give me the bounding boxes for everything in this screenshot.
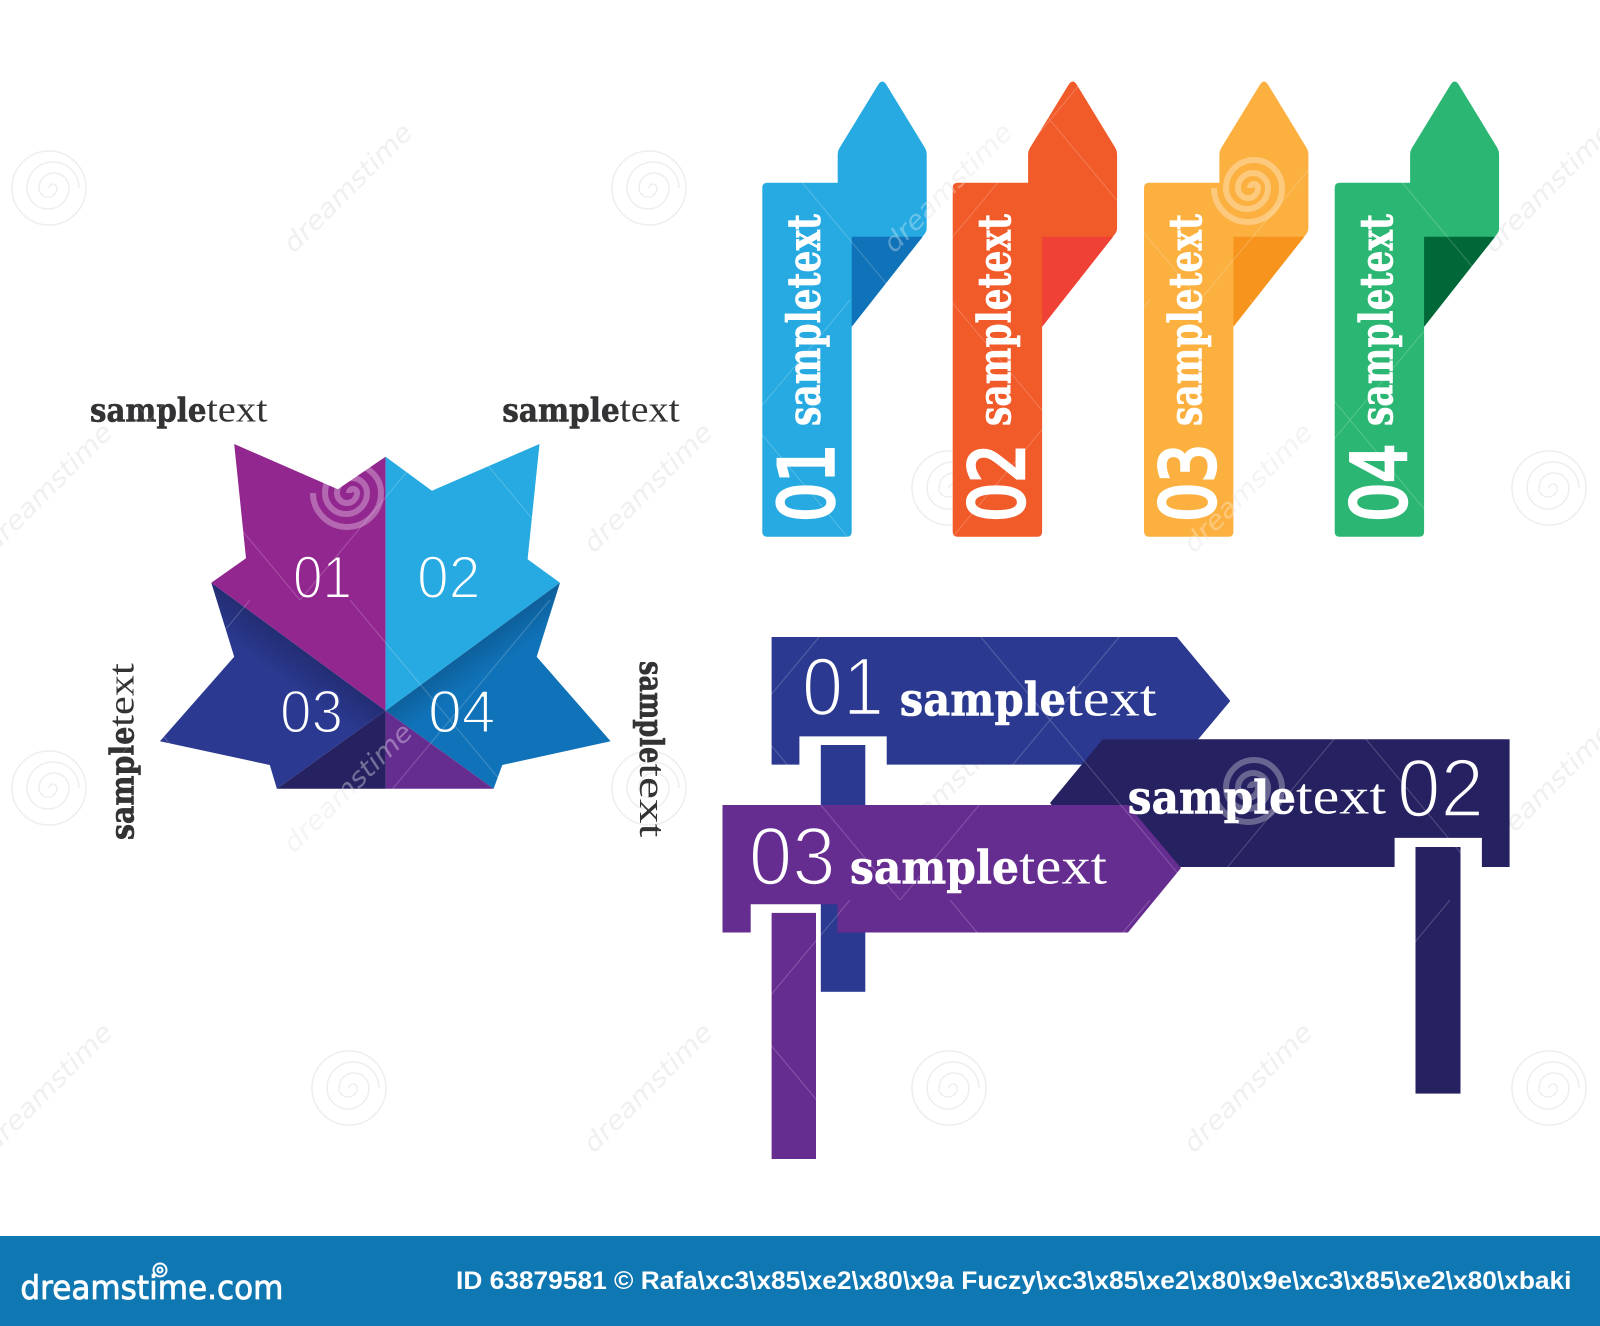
fold shadow left xyxy=(160,583,386,789)
watermark layer: dreamstime xyxy=(1178,1018,1319,1159)
watermark on star bottom: dreamstime xyxy=(278,718,419,859)
number 03: 03 xyxy=(280,678,343,745)
fold xyxy=(852,237,923,327)
sign 01 label xyxy=(900,671,1157,728)
label: star left rotated: text xyxy=(101,662,142,727)
number 04: 04 xyxy=(428,678,496,745)
footer logo: dreamstime.com xyxy=(20,1268,283,1307)
sign 01 number: 01 xyxy=(802,640,884,733)
sign 02 label: sample xyxy=(1128,770,1296,824)
footer bar xyxy=(0,1236,1600,1326)
panel: signpost 03 xyxy=(722,805,1181,1159)
label: star top right: text xyxy=(620,390,680,431)
banner label: sampletext xyxy=(1349,213,1403,426)
banner label: sampletext xyxy=(777,213,831,426)
watermark layer: dreamstime xyxy=(1178,418,1319,559)
panel: banner 02 orange xyxy=(953,82,1117,537)
sign 02 arrow xyxy=(1050,739,1510,867)
label: star left rotated: sample xyxy=(102,727,141,840)
banner number: 04 xyxy=(1335,444,1423,522)
star segment 04 xyxy=(386,583,611,789)
star segment 01 xyxy=(211,444,386,711)
watermark spiral on sign 02 xyxy=(1214,760,1282,822)
panel: banner 01 blue xyxy=(762,82,927,537)
label: star top right: sample xyxy=(502,391,620,430)
number 02: 02 xyxy=(417,544,480,611)
banner label: sampletext xyxy=(967,213,1021,426)
sign 02 number: 02 xyxy=(1397,741,1484,834)
label: star right rotated: text xyxy=(631,763,672,838)
sign 03 number: 03 xyxy=(749,809,836,902)
number 01: 01 xyxy=(293,544,352,611)
watermark text over blue banner: dreamstime xyxy=(878,118,1019,259)
label: star top left: text xyxy=(206,390,268,431)
sign 01 arrow xyxy=(772,637,1230,765)
fold xyxy=(1042,237,1113,327)
panel: star diagram xyxy=(160,444,611,859)
sign 03 arrow xyxy=(722,805,1181,932)
watermark layer: dreamstime xyxy=(578,1018,719,1159)
sign 02 label: text xyxy=(1296,768,1387,826)
footer credit: ID 63879581 © Rafa\xc3\x85\xe2\x80\x9a Fuczy\xc3\x85\xe2\x80\x9e\xc3\x85\xe2\x80\xbaki xyxy=(456,1267,1572,1295)
banner number: 03 xyxy=(1145,444,1233,522)
bottom dark triangle xyxy=(277,711,386,789)
banner number: 01 xyxy=(763,444,851,522)
panel: signpost 02 xyxy=(1050,739,1510,1094)
panel: banner 04 green xyxy=(1335,82,1499,537)
watermark layer: dreamstime xyxy=(278,718,419,859)
watermark layer: dreamstime xyxy=(878,718,1019,859)
watermark layer: dreamstime xyxy=(278,118,419,259)
watermark layer: dreamstime xyxy=(878,118,1019,259)
watermark text over yellow banner: dreamstime xyxy=(1178,418,1319,559)
panel: banner 03 yellow xyxy=(1144,82,1308,537)
banner label: sampletext xyxy=(1159,213,1213,426)
watermark spiral on star xyxy=(313,465,381,527)
star segment 03 xyxy=(160,583,386,789)
panel: signpost 01 xyxy=(772,637,1230,992)
post 03 xyxy=(772,913,816,1159)
sign 03 label: text xyxy=(1019,839,1108,896)
watermark layer: dreamstime xyxy=(578,418,719,559)
sign 03 label: sample xyxy=(850,841,1019,895)
post 02 xyxy=(1416,847,1460,1094)
watermark spiral on yellow banner xyxy=(1214,160,1282,222)
banner number: 02 xyxy=(953,444,1041,522)
post 01 xyxy=(821,745,865,992)
fold xyxy=(1424,237,1495,327)
bottom purple triangle xyxy=(386,711,494,789)
fold shadow right xyxy=(386,583,611,789)
sign 03 label xyxy=(850,839,1108,896)
watermark layer xyxy=(0,118,1600,1159)
star segment 02 xyxy=(386,444,560,711)
sign 01 label: text xyxy=(1066,671,1157,728)
label: star right rotated: sample xyxy=(632,661,671,763)
sign 01 label: sample xyxy=(900,673,1066,727)
sign 02 label xyxy=(1128,768,1387,826)
label: star top left: sample xyxy=(90,391,206,430)
fold xyxy=(1233,237,1304,327)
footer logo spiral xyxy=(154,1264,166,1276)
